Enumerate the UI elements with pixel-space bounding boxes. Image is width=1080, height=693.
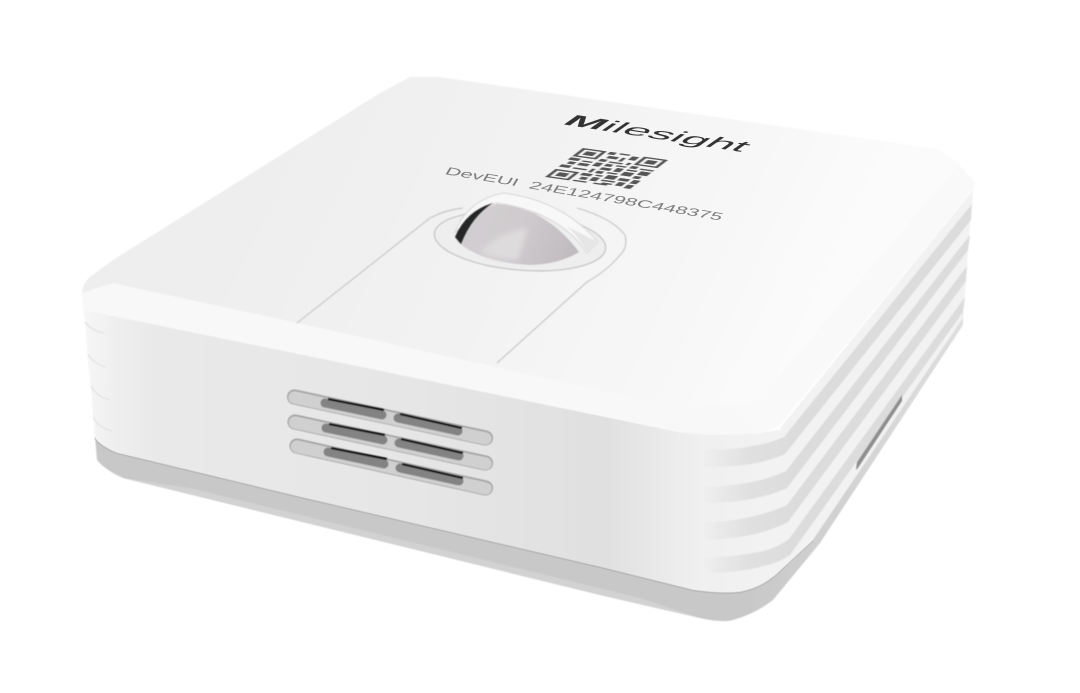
- brand logo text: Milesight: [556, 112, 758, 155]
- lid: [82, 77, 975, 435]
- vent slots: [294, 397, 486, 488]
- rib shadow bands: [703, 204, 972, 573]
- right bevel: [730, 165, 975, 433]
- side port slot: [855, 395, 903, 474]
- lens ring: [432, 205, 608, 277]
- front wall of the housing: [83, 308, 813, 593]
- dome highlight: [480, 228, 528, 260]
- ribbed right side wall: [703, 190, 973, 577]
- dome shadow crescent: [455, 203, 493, 244]
- vent row 3: [297, 446, 486, 488]
- hood inner shading: [566, 226, 598, 253]
- lid top face: [82, 77, 975, 435]
- left corner rib marks: [85, 322, 112, 431]
- motion sensor lens: [432, 193, 608, 277]
- front bevel: [82, 283, 757, 435]
- hood: [455, 193, 598, 253]
- vent row 2: [295, 422, 486, 464]
- sensor cover panel outline: [297, 208, 626, 363]
- device identifier text: DevEUI 24E124798C448375: [443, 165, 726, 223]
- dome: [456, 204, 579, 265]
- QR code: [545, 148, 668, 189]
- vent row 1: [294, 397, 486, 438]
- grey base of the housing: [95, 312, 963, 621]
